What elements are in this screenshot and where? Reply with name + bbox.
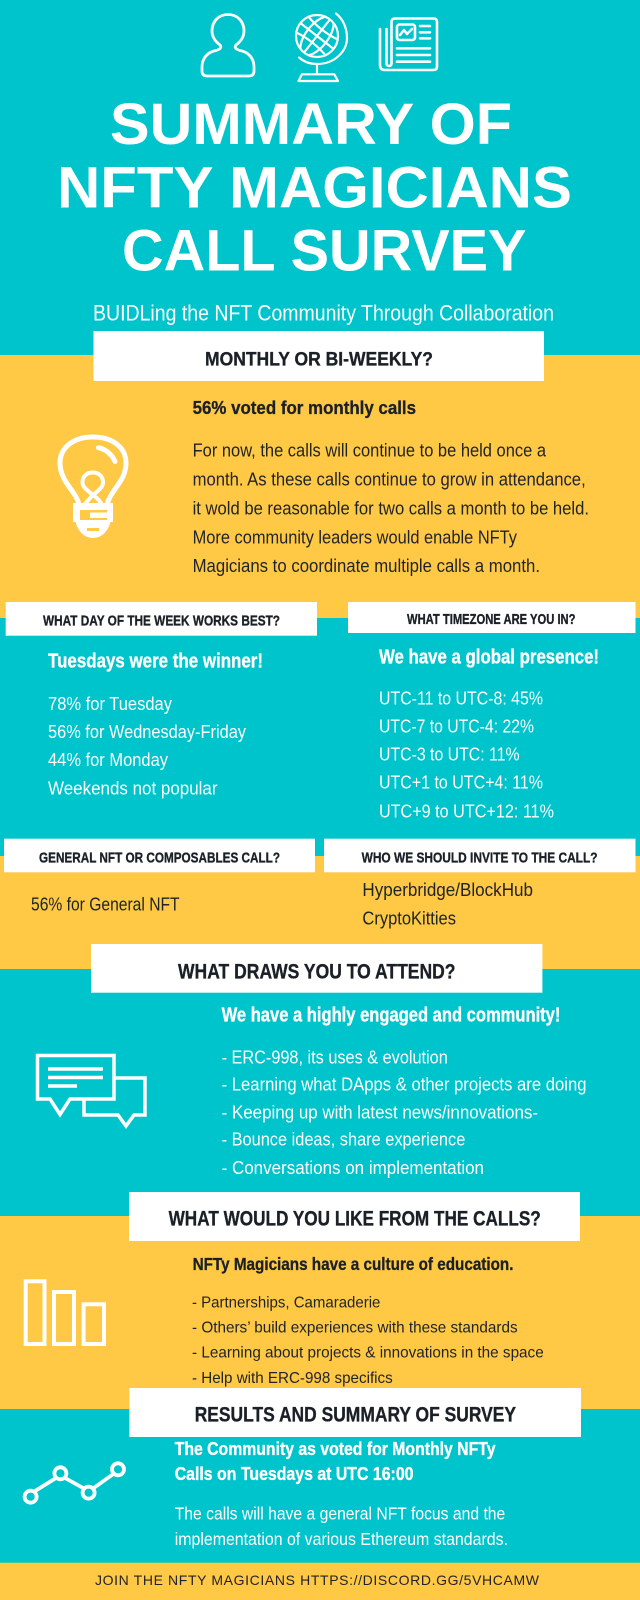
icon: bar chart [26, 1281, 104, 1344]
invitee list: CryptoKitties [362, 908, 456, 929]
heading box [91, 944, 542, 993]
attendance reasons list [222, 1047, 586, 1178]
panel: monthly or bi-weekly [0, 331, 640, 619]
wishes list: - Help with ERC-998 specifics [192, 1370, 393, 1387]
heading box: day of the week [6, 602, 317, 636]
heading box: WHAT DRAWS YOU TO ATTEND? [178, 960, 456, 983]
attendance reasons list: - Keeping up with latest news/innovations- [222, 1102, 538, 1122]
result statement: Calls on Tuesdays at UTC 16:00 [175, 1463, 414, 1484]
paragraph: For now, the calls will continue to be held once a [193, 440, 547, 461]
paragraph: month. As these calls continue to grow in attendance, [193, 469, 586, 490]
paragraph [193, 440, 589, 576]
heading box: timezone [348, 602, 636, 633]
day results: Weekends not popular [48, 778, 218, 799]
attendance reasons list: - Conversations on implementation [222, 1158, 484, 1178]
heading box: RESULTS AND SUMMARY OF SURVEY [195, 1404, 516, 1427]
education statement: NFTy Magicians have a culture of education. [193, 1254, 514, 1274]
icon: chat bubbles [38, 1056, 145, 1126]
timezone results: UTC+1 to UTC+4: 11% [379, 772, 543, 793]
title: SUMMARY OF [110, 92, 512, 157]
attendance reasons list: - Learning what DApps & other projects are doing [222, 1075, 586, 1095]
timezone results: UTC+9 to UTC+12: 11% [379, 800, 554, 821]
result statement: The Community as voted for Monthly NFTy [175, 1438, 496, 1459]
result details: The calls will have a general NFT focus and the [175, 1503, 505, 1523]
timezone results [379, 646, 599, 821]
subtitle: BUIDLing the NFT Community Through Collaboration [93, 301, 554, 326]
paragraph: Magicians to coordinate multiple calls a month. [193, 555, 540, 576]
panel: focus and invitees [0, 839, 640, 970]
title: CALL SURVEY [122, 219, 526, 284]
attendance reasons list: - Bounce ideas, share experience [222, 1130, 465, 1150]
heading box: WHAT WOULD YOU LIKE FROM THE CALLS? [169, 1208, 541, 1231]
heading box [129, 1388, 581, 1437]
panel: day and timezone [0, 602, 640, 857]
attendance reasons list: - ERC-998, its uses & evolution [222, 1047, 448, 1067]
icon: person [202, 14, 254, 76]
heading box: general or composables [4, 839, 315, 872]
day results: 78% for Tuesday [48, 693, 173, 714]
day results: 44% for Monday [48, 749, 169, 770]
heading box: MONTHLY OR BI-WEEKLY? [205, 350, 433, 371]
result details [175, 1503, 508, 1549]
timezone results: We have a global presence! [379, 646, 599, 668]
heading box: timezone: WHAT TIMEZONE ARE YOU IN? [407, 611, 576, 628]
heading box: who to invite [324, 839, 636, 872]
day results: 56% for Wednesday-Friday [48, 721, 247, 742]
day results [48, 651, 263, 799]
day results: Tuesdays were the winner! [48, 651, 263, 673]
invitee list [362, 879, 533, 929]
heading box [94, 331, 544, 381]
title [57, 92, 572, 284]
timezone results: UTC-11 to UTC-8: 45% [379, 688, 543, 709]
panel: what draws you to attend [0, 944, 640, 1217]
wishes list: - Others’ build experiences with these standards [192, 1320, 518, 1337]
icon: globe [294, 12, 348, 82]
paragraph: More community leaders would enable NFTy [193, 526, 518, 547]
wishes list: - Partnerships, Camaraderie [192, 1294, 380, 1311]
icon: line chart [25, 1463, 124, 1503]
icon: newspaper [380, 18, 437, 70]
invitee list: Hyperbridge/BlockHub [362, 879, 533, 900]
key stat: 56% voted for monthly calls [193, 398, 416, 418]
panel: results and summary [0, 1388, 640, 1563]
timezone results: UTC-3 to UTC: 11% [379, 744, 520, 765]
icon: light bulb [60, 437, 126, 538]
general nft result: 56% for General NFT [31, 894, 180, 915]
heading box: general or composables: GENERAL NFT OR COMPOSABLES CALL? [39, 849, 280, 866]
heading box [129, 1192, 580, 1241]
result details: implementation of various Ethereum standards. [175, 1529, 508, 1549]
panel: what would you like from the calls [0, 1192, 640, 1410]
panel: header [61, 12, 570, 325]
wishes list [192, 1294, 544, 1387]
title: NFTY MAGICIANS [57, 155, 572, 220]
panel: footer [0, 1563, 640, 1600]
wishes list: - Learning about projects & innovations in the space [192, 1345, 544, 1362]
timezone results: UTC-7 to UTC-4: 22% [379, 716, 534, 737]
footer link text: JOIN THE NFTY MAGICIANS HTTPS://DISCORD.GG/5VHCAMW [95, 1572, 540, 1588]
paragraph: it wold be reasonable for two calls a month to be held. [193, 498, 589, 519]
heading box: day of the week: WHAT DAY OF THE WEEK WORKS BEST? [43, 613, 280, 630]
result statement [175, 1438, 496, 1484]
engagement statement: We have a highly engaged and community! [222, 1005, 560, 1027]
